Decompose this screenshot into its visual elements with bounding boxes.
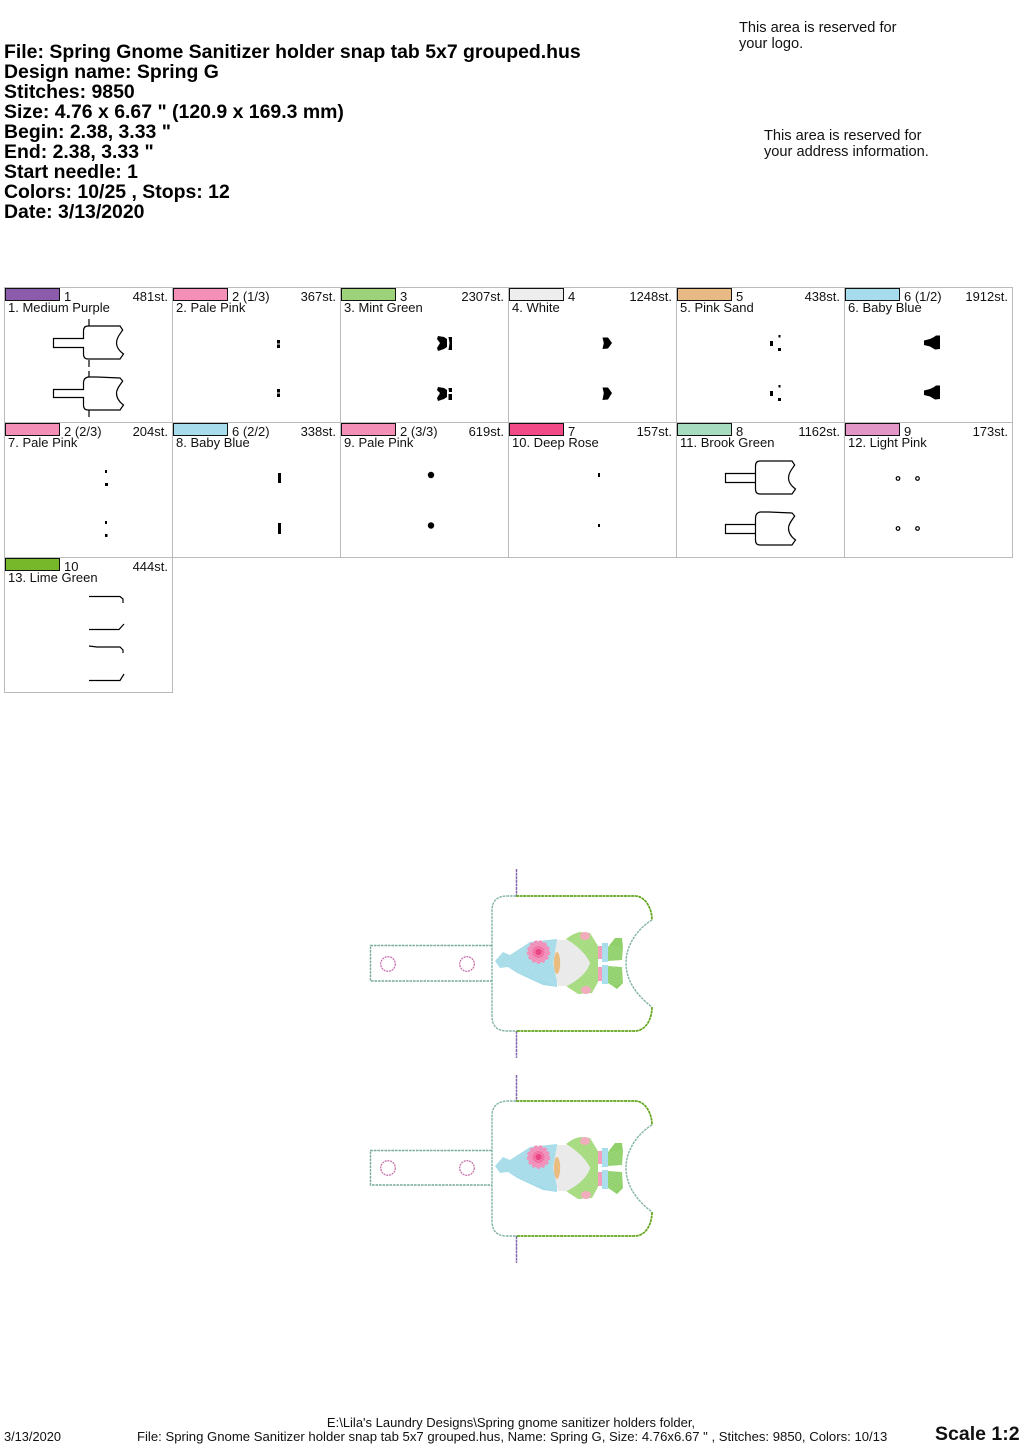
footer file path: E:\Lila's Laundry Designs\Spring gnome sanitizer holders folder, bbox=[327, 1415, 695, 1430]
gnome beard bbox=[553, 940, 590, 986]
lime top and bottom stitching bbox=[516, 1101, 652, 1236]
color name: 6. Baby Blue bbox=[848, 300, 922, 315]
needle number: 6 (1/2) bbox=[904, 289, 942, 304]
swatch bbox=[341, 288, 396, 301]
stitch count: 438st. bbox=[805, 289, 840, 304]
swatch bbox=[845, 423, 900, 436]
snap tab outline bbox=[370, 1150, 492, 1185]
stitch count: 2307st. bbox=[461, 289, 504, 304]
swatch bbox=[677, 423, 732, 436]
needle number: 7 bbox=[568, 424, 575, 439]
swatch bbox=[341, 423, 396, 436]
color block 11: Brook Green bbox=[676, 422, 845, 558]
needle number: 10 bbox=[64, 559, 78, 574]
footer design summary: File: Spring Gnome Sanitizer holder snap tab 5x7 grouped.hus, Name: Spring G, Size: 4.76x6.67 " , Stitches: 9850, Colors: 10/13 bbox=[137, 1429, 887, 1444]
color name: 8. Baby Blue bbox=[176, 435, 250, 450]
swatch bbox=[509, 423, 564, 436]
color name: 9. Pale Pink bbox=[344, 435, 413, 450]
stitch preview bbox=[724, 460, 796, 546]
stitch preview bbox=[598, 473, 600, 527]
swatch bbox=[173, 423, 228, 436]
stitch count: 444st. bbox=[133, 559, 168, 574]
color block 4: White bbox=[508, 287, 677, 423]
stitch preview bbox=[602, 338, 612, 400]
needle number: 3 bbox=[400, 289, 407, 304]
stitch count: 1162st. bbox=[798, 424, 840, 439]
color block 5: Pink Sand bbox=[676, 287, 845, 423]
stitch preview bbox=[105, 470, 108, 537]
swatch bbox=[5, 423, 60, 436]
color name: 1. Medium Purple bbox=[8, 300, 110, 315]
stitch preview bbox=[52, 319, 124, 417]
stitch texture bbox=[495, 1137, 623, 1199]
swatch bbox=[509, 288, 564, 301]
placement line bbox=[516, 869, 518, 1058]
snap circles bbox=[381, 957, 474, 971]
gnome body bbox=[566, 932, 598, 994]
stitch preview bbox=[896, 476, 920, 531]
gnome nose bbox=[554, 1157, 560, 1179]
color name: 10. Deep Rose bbox=[512, 435, 599, 450]
color block 1: Medium Purple bbox=[4, 287, 173, 423]
color name: 2. Pale Pink bbox=[176, 300, 245, 315]
swatch bbox=[173, 288, 228, 301]
lime top and bottom stitching bbox=[516, 896, 652, 1031]
legs bbox=[598, 943, 608, 984]
color name: 3. Mint Green bbox=[344, 300, 423, 315]
needle number: 2 (2/3) bbox=[64, 424, 102, 439]
upper snap tab holder bbox=[370, 869, 652, 1058]
stitch count: 619st. bbox=[469, 424, 504, 439]
color block 10: Deep Rose bbox=[508, 422, 677, 558]
color name: 4. White bbox=[512, 300, 560, 315]
needle number: 2 (3/3) bbox=[400, 424, 438, 439]
color name: 12. Light Pink bbox=[848, 435, 927, 450]
boots bbox=[608, 938, 623, 989]
color block 8: Baby Blue bbox=[172, 422, 341, 558]
stitch preview bbox=[88, 596, 124, 682]
color name: 11. Brook Green bbox=[680, 435, 774, 450]
gnome beard bbox=[553, 1145, 590, 1191]
stitch texture bbox=[495, 932, 623, 994]
pompom bbox=[528, 1146, 549, 1168]
swatch bbox=[5, 558, 60, 571]
color block 13: Lime Green bbox=[4, 557, 173, 693]
body patches bbox=[580, 1137, 591, 1199]
gnome hat bbox=[495, 939, 557, 987]
gnome bbox=[495, 1137, 623, 1199]
stitch count: 338st. bbox=[301, 424, 336, 439]
stitch count: 481st. bbox=[133, 289, 168, 304]
lower snap tab holder bbox=[370, 1075, 652, 1263]
gnome hat bbox=[495, 1144, 557, 1192]
stitch count: 1248st. bbox=[629, 289, 672, 304]
pompom bbox=[528, 942, 549, 962]
stitch count: 204st. bbox=[133, 424, 168, 439]
holder outline bbox=[492, 896, 652, 1031]
footer date: 3/13/2020 bbox=[4, 1429, 61, 1444]
color name: 7. Pale Pink bbox=[8, 435, 77, 450]
color name: 5. Pink Sand bbox=[680, 300, 754, 315]
needle number: 4 bbox=[568, 289, 575, 304]
needle number: 8 bbox=[736, 424, 743, 439]
address placeholder note: This area is reserved for your address information. bbox=[764, 128, 929, 160]
snap circles bbox=[381, 1161, 474, 1175]
needle number: 5 bbox=[736, 289, 743, 304]
color block 9: Pale Pink bbox=[340, 422, 509, 558]
color block 7: Pale Pink bbox=[4, 422, 173, 558]
holder outline bbox=[492, 1101, 652, 1236]
legs bbox=[598, 1148, 608, 1189]
color block 6: Baby Blue bbox=[844, 287, 1013, 423]
gnome nose bbox=[554, 952, 560, 974]
color name: 13. Lime Green bbox=[8, 570, 98, 585]
swatch bbox=[5, 288, 60, 301]
stitch preview bbox=[428, 472, 434, 529]
boots bbox=[608, 1143, 623, 1194]
stitch preview bbox=[437, 336, 452, 401]
swatch bbox=[845, 288, 900, 301]
needle number: 9 bbox=[904, 424, 911, 439]
stitch preview bbox=[770, 335, 781, 401]
needle number: 2 (1/3) bbox=[232, 289, 270, 304]
stitch count: 1912st. bbox=[965, 289, 1008, 304]
stitch preview bbox=[278, 473, 281, 534]
body patches bbox=[580, 932, 591, 994]
design information text block: File: Spring Gnome Sanitizer holder snap tab 5x7 grouped.hus Design name: Spring G Stitches: 9850 Size: 4.76 x 6.67 " (120.9 x 169.3 mm) Begin: 2.38, 3.33 " End: 2.38, 3.33 " Start needle: 1 Colors: 10/25 , Stops: 12 Date: 3/13/2020 bbox=[4, 41, 581, 223]
color block 3: Mint Green bbox=[340, 287, 509, 423]
swatch bbox=[677, 288, 732, 301]
stitch count: 367st. bbox=[301, 289, 336, 304]
gnome body bbox=[566, 1137, 598, 1199]
color block 2: Pale Pink bbox=[172, 287, 341, 423]
placement line bbox=[516, 1075, 518, 1263]
stitch preview bbox=[277, 340, 280, 397]
needle number: 1 bbox=[64, 289, 71, 304]
stitch count: 173st. bbox=[973, 424, 1008, 439]
scale label: Scale 1:2 bbox=[935, 1423, 1020, 1445]
color block 12: Light Pink bbox=[844, 422, 1013, 558]
logo placeholder note: This area is reserved for your logo. bbox=[739, 20, 897, 52]
stitch count: 157st. bbox=[637, 424, 672, 439]
needle number: 6 (2/2) bbox=[232, 424, 270, 439]
snap tab outline bbox=[370, 946, 492, 981]
stitch preview bbox=[924, 336, 940, 400]
